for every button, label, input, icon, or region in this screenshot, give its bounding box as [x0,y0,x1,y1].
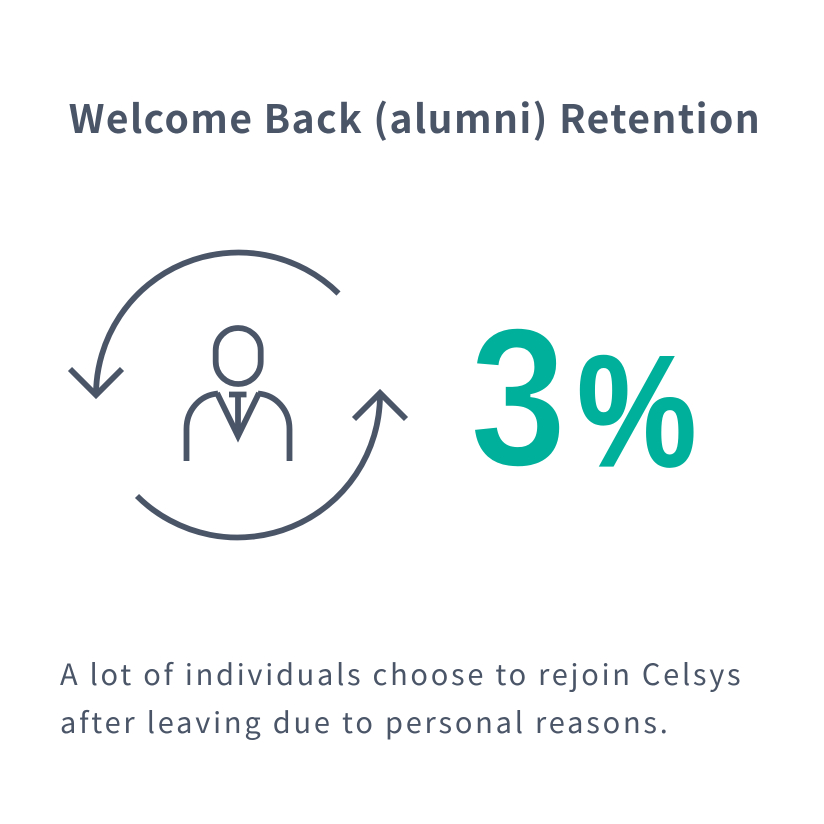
icon: person in suit and tie [186,328,290,461]
title: Welcome Back (alumni) Retention [69,89,761,145]
description text [60,652,743,742]
description text: A lot of individuals choose to rejoin Celsys [60,652,743,694]
icon: returning employee cycle [70,253,406,537]
statistic: 3 percent: % [577,323,697,501]
statistic: 3 percent [470,286,697,508]
arrow: lower arc pointing up-right [137,393,406,537]
arrow: upper arc pointing down-left [70,253,338,395]
statistic: 3 percent: 3 [470,286,567,508]
description text: after leaving due to personal reasons. [60,700,671,742]
